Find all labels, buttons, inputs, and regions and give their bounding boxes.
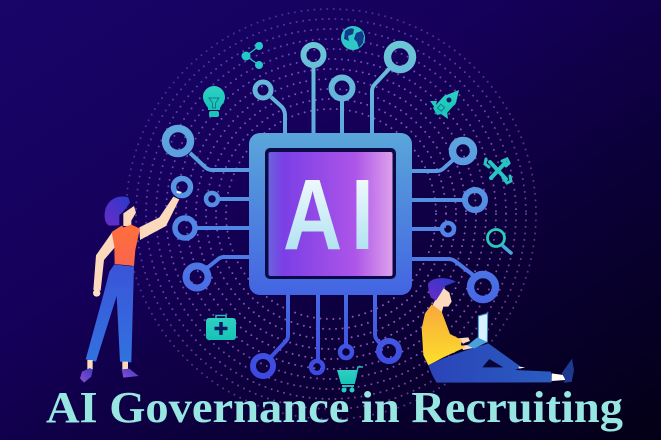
chip label: I: [351, 159, 374, 271]
AI chip: [249, 133, 412, 295]
figure: man with laptop: [422, 278, 574, 383]
icon: medical kit: [206, 316, 236, 340]
figure: woman reaching: [80, 191, 182, 383]
chip label: A: [283, 159, 342, 271]
circuit rings: [166, 44, 496, 376]
dotted concentric circles: [126, 9, 536, 419]
icon: globe: [341, 26, 365, 50]
icon: magnifier: [488, 230, 511, 253]
title: AI Governance in Recruiting: [46, 383, 623, 432]
icon: rocket: [430, 90, 459, 119]
icon: tools: [485, 159, 511, 183]
icon: share: [242, 42, 263, 69]
circuit wires: [190, 66, 473, 360]
icon: shopping cart: [337, 367, 363, 392]
icon: light bulb: [203, 86, 225, 117]
